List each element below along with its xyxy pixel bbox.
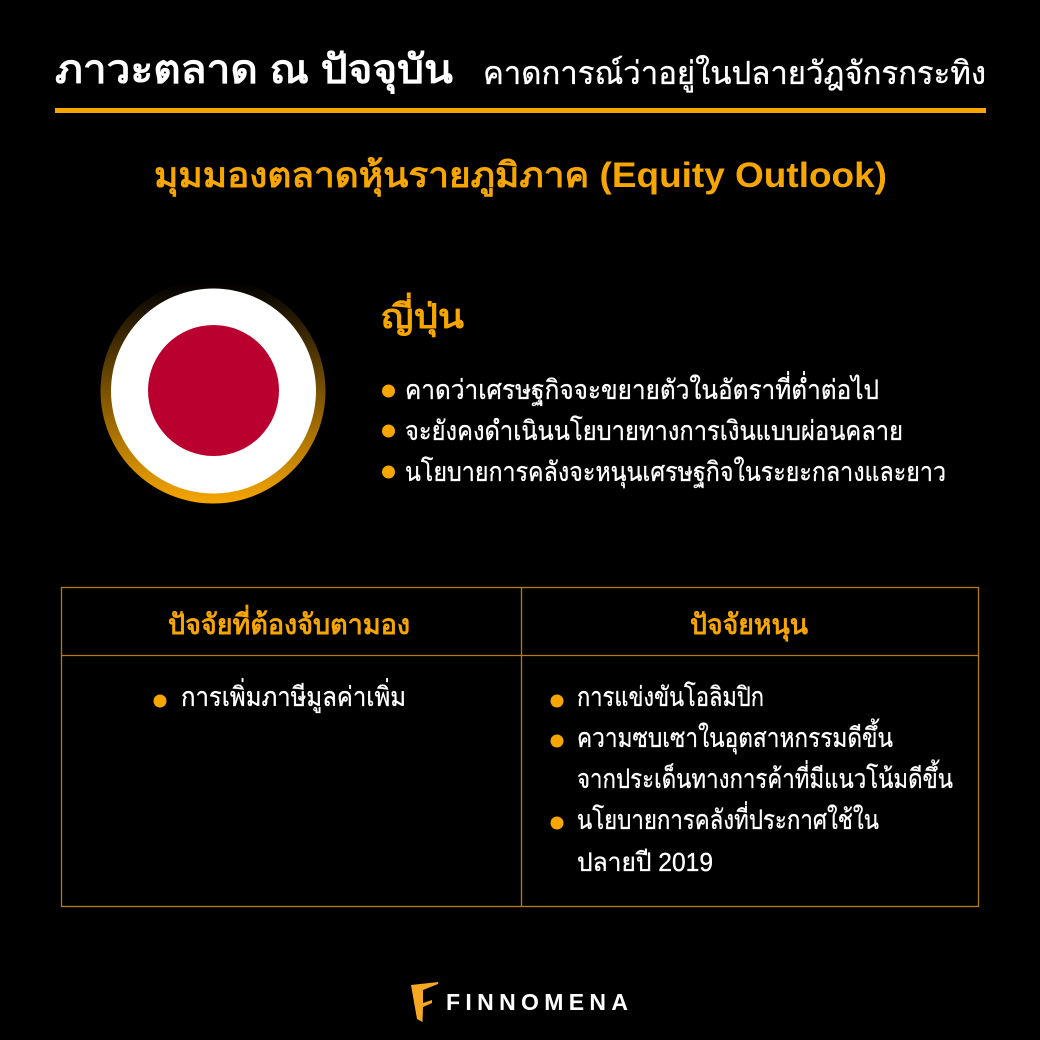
bullet 1: คาดว่าเศรษฐกิจจะขยายตัวในอัตราที่ต่ำต่อไป (405, 371, 879, 406)
bullet 2: จะยังคงดำเนินนโยบายทางการเงินแบบผ่อนคลาย (405, 416, 903, 446)
outlook bullet list (382, 371, 946, 489)
table grid (62, 588, 978, 906)
header (55, 48, 986, 113)
item: fiscal policy: ปลายปี 2019 (577, 847, 713, 877)
country heading: ญี่ปุ่น (381, 292, 464, 338)
item: fiscal policy (550, 801, 879, 877)
factors table (62, 588, 978, 906)
logo: FINNOMENA (411, 982, 628, 1022)
item: industrial confidence (550, 718, 953, 794)
item: fiscal policy: นโยบายการคลังที่ประกาศใช้ใน (577, 801, 879, 835)
item: Olympics: การแข่งขันโอลิมปิก (577, 682, 764, 712)
bullet 3: นโยบายการคลังจะหนุนเศรษฐกิจในระยะกลางและยาว (405, 456, 946, 489)
title: ภาวะตลาด ณ ปัจจุบัน (55, 48, 453, 95)
subtitle: คาดการณ์ว่าอยู่ในปลายวัฎจักรกระทิง (483, 55, 986, 93)
wordmark: FINNOMENA (446, 989, 628, 1015)
icon: Japan flag badge (100, 278, 326, 504)
header rule (55, 108, 986, 113)
section heading: มุมมองตลาดหุ้นรายภูมิภาค (Equity Outlook) (154, 156, 887, 197)
left column list (154, 678, 406, 713)
item: industrial confidence: ความซบเซาในอุตสาหกรรมดีขึ้น (577, 718, 893, 755)
left column list: การเพิ่มภาษีมูลค่าเพิ่ม (181, 678, 406, 713)
item: industrial confidence: จากประเด็นทางการค้าที่มีแนวโน้มดีขึ้น (577, 759, 953, 794)
column heading: factors to watch: ปัจจัยที่ต้องจับตามอง (168, 604, 410, 640)
icon: logo mark (411, 982, 438, 1022)
column heading: supporting factors: ปัจจัยหนุน (690, 609, 808, 642)
right column list (550, 682, 953, 877)
